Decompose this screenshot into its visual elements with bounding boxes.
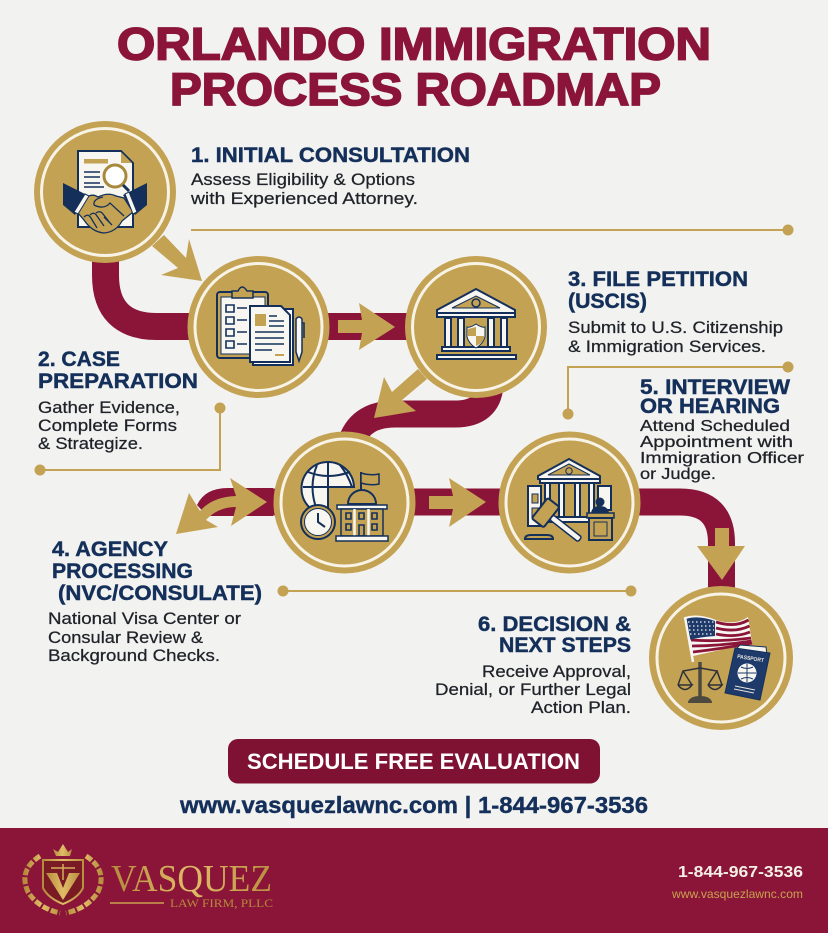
step 6 text: Receive Approval, [482, 663, 631, 681]
arrow: step 5 to 6 [697, 528, 745, 580]
footer phone: 1-844-967-3536 [678, 864, 803, 881]
step 5 text [640, 376, 804, 483]
arrow: step 3 to 4 [374, 369, 427, 418]
step 1 circle icon: document and handshake [34, 121, 176, 263]
step 5 text: 5. INTERVIEW [640, 376, 790, 399]
step 5 circle icon: courthouse, gavel and podium [498, 432, 640, 574]
step 6 text: Action Plan. [531, 699, 631, 717]
step 3 text: 3. FILE PETITION [568, 268, 748, 291]
title: ORLANDO IMMIGRATION [117, 18, 711, 70]
step 5 text: Attend Scheduled [640, 418, 790, 435]
step 1 text: Assess Eligibility & Options [191, 171, 415, 189]
step 2 text: Complete Forms [38, 417, 177, 435]
step 2 text [38, 348, 198, 453]
step 4 text: Consular Review & [48, 629, 203, 647]
step 6 circle icon: flag, scales and passport: PASSPORT [737, 654, 765, 664]
connector: step 2 [34, 402, 226, 476]
step 6 circle icon: flag, scales and passport [649, 586, 793, 730]
call to action button: SCHEDULE FREE EVALUATION [247, 749, 580, 774]
step 2 circle icon: clipboard and documents [188, 256, 330, 398]
step 4 text: National Visa Center or [48, 610, 242, 628]
connector: step 4 to 6 [278, 586, 636, 596]
step 5 text: Appointment with [640, 434, 793, 451]
arrow: step 2 to 3 [338, 303, 395, 350]
roadmap path [106, 250, 722, 600]
call to action button [228, 739, 600, 784]
step 4 text: 4. AGENCY [52, 538, 168, 561]
step 3 text: & Immigration Services. [568, 338, 766, 356]
step 4 text: PROCESSING [52, 560, 193, 583]
step 5 text: Immigration Officer [640, 450, 804, 467]
step 3 circle icon: government building with shield [405, 256, 547, 398]
step 5 text: OR HEARING [640, 395, 780, 418]
logo wordmark: VASQUEZ [111, 858, 272, 900]
logo wordmark: LAW FIRM, PLLC [170, 896, 273, 910]
footer website: www.vasquezlawnc.com [671, 887, 803, 901]
step 6 text [435, 613, 631, 717]
arrow: two-way step 4 [176, 478, 267, 534]
step 5 text: or Judge. [640, 466, 716, 483]
step 6 text: Denial, or Further Legal [435, 681, 631, 699]
logo emblem [25, 844, 101, 913]
step 3 text [568, 268, 783, 356]
step 2 text: 2. CASE [38, 348, 120, 371]
step 1 text [190, 144, 470, 208]
step 3 text: (USCIS) [568, 290, 647, 313]
step 6 text: NEXT STEPS [499, 634, 631, 657]
step 6 text: 6. DECISION & [478, 613, 631, 636]
title [117, 18, 711, 115]
step 4 text: (NVC/CONSULATE) [58, 582, 262, 605]
connector: step 1 rule [191, 224, 794, 236]
step 2 text: & Strategize. [38, 435, 143, 453]
step 1 text: with Experienced Attorney. [190, 190, 418, 208]
step 4 text: Background Checks. [48, 647, 220, 665]
step 3 text: Submit to U.S. Citizenship [568, 319, 783, 337]
arrow: step 4 to 5 [429, 478, 486, 527]
step 4 circle icon: globe, clock and consulate [274, 432, 416, 574]
contact line: www.vasquezlawnc.com | 1-844-967-3536 [179, 792, 648, 818]
footer band [0, 828, 828, 933]
step 2 text: Gather Evidence, [38, 399, 180, 417]
arrow: step 1 to 2 [152, 235, 202, 281]
connector: step 3 to 5 [562, 362, 794, 420]
step 1 text: 1. INITIAL CONSULTATION [191, 144, 470, 167]
title: PROCESS ROADMAP [170, 64, 661, 115]
step 4 text [48, 538, 262, 665]
step 2 text: PREPARATION [38, 370, 198, 393]
